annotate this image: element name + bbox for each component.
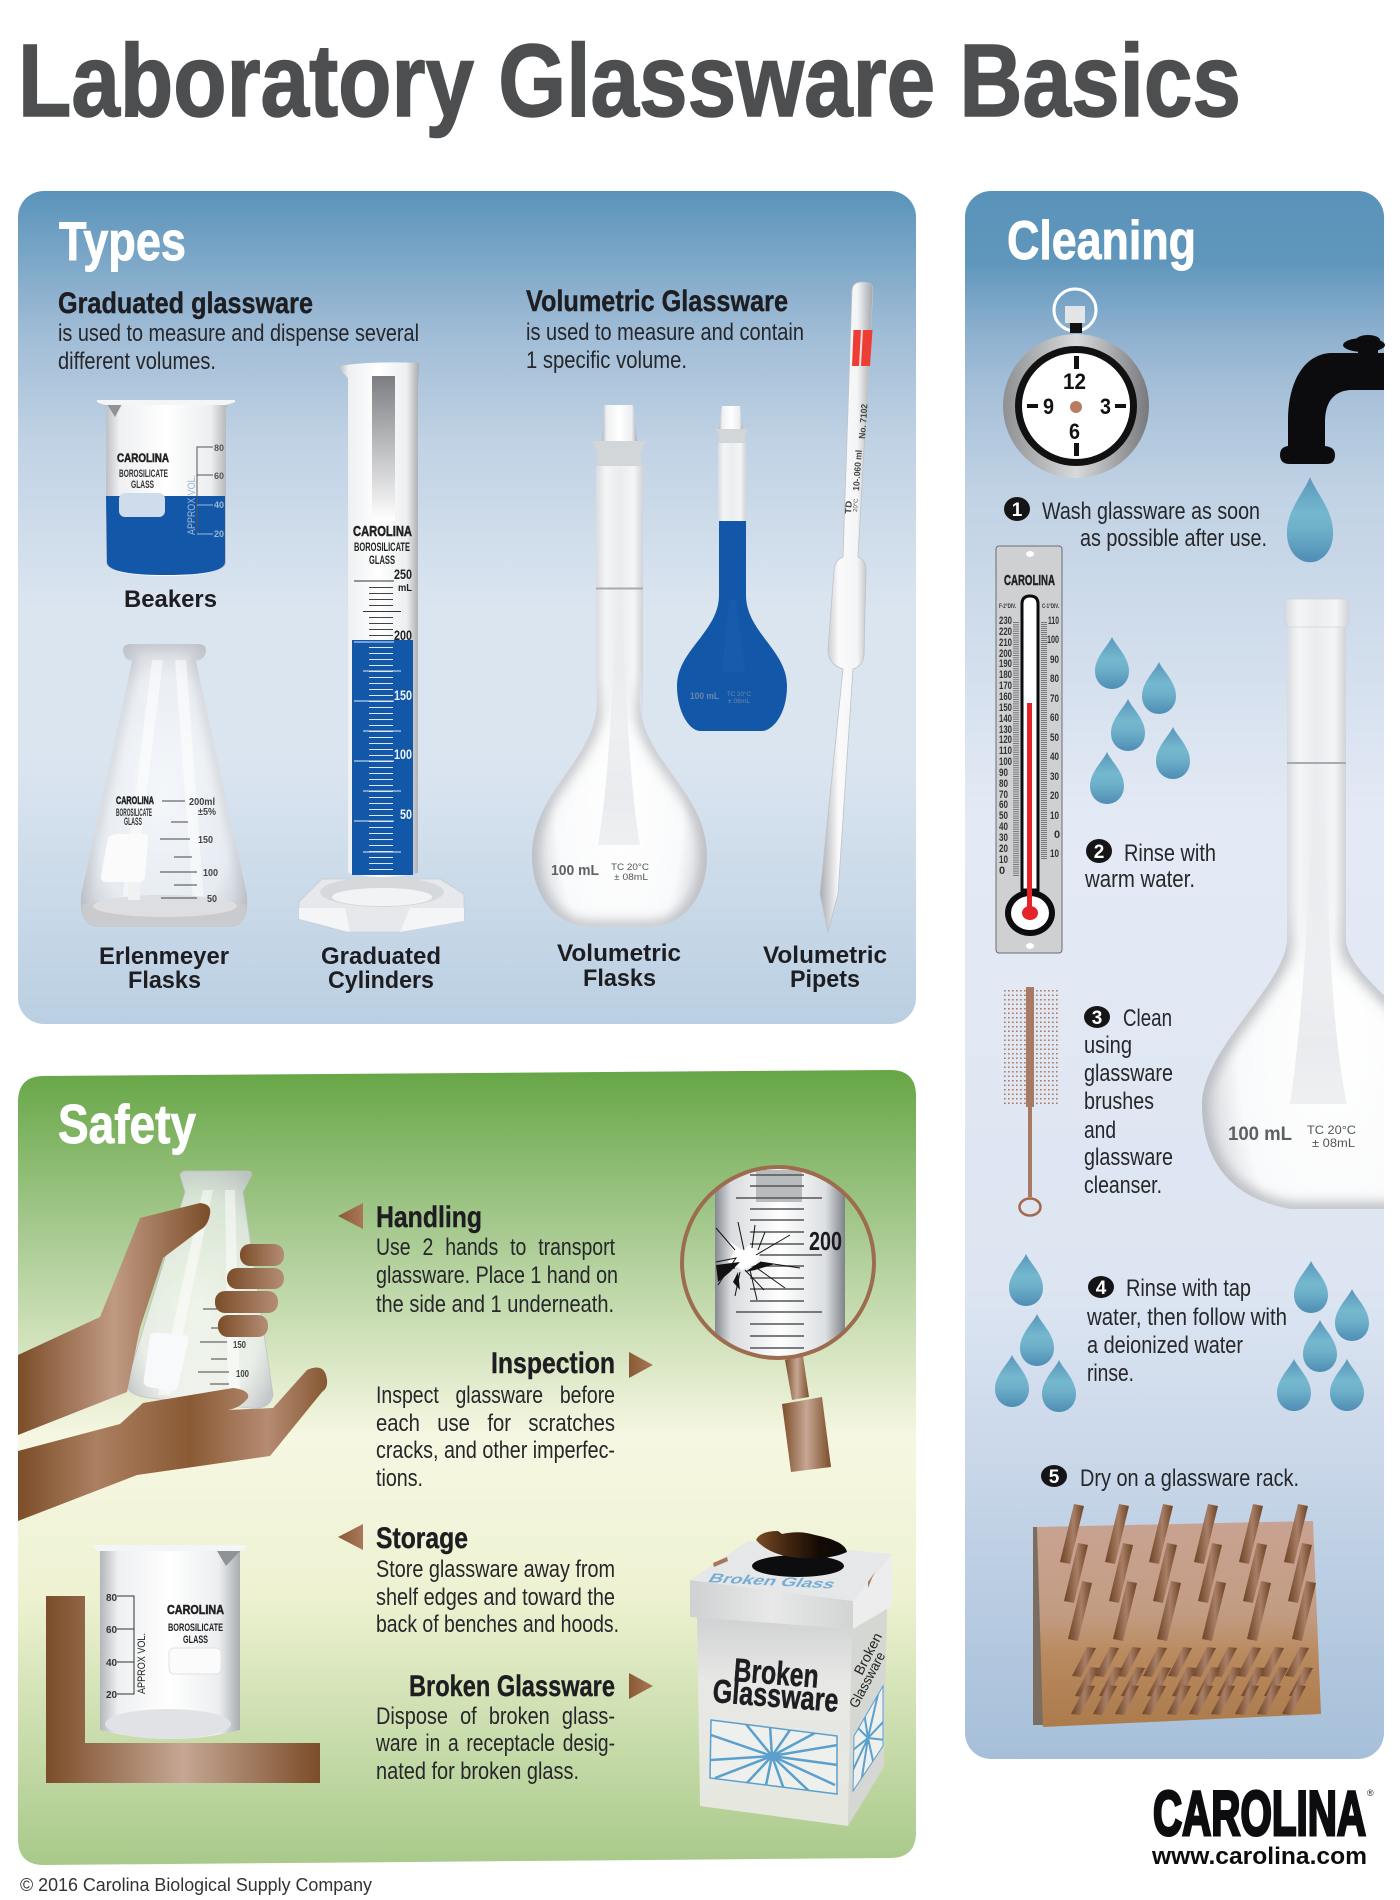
beaker: 40 (214, 500, 224, 510)
graduated cylinder: GLASS (369, 553, 395, 567)
step 3 text: and (1084, 1117, 1116, 1144)
heading: types: Types (59, 210, 186, 272)
copyright: © 2016 Carolina Biological Supply Company (20, 1875, 372, 1895)
text block: inspection: Inspection (491, 1347, 615, 1380)
icon: thermometer: C-1°DIV. (1042, 604, 1059, 610)
beaker: APPROX VOL. (186, 475, 198, 535)
icon: thermometer: 60 (999, 799, 1008, 811)
text block: graduated glassware (58, 287, 419, 375)
arrow: inspection (629, 1352, 653, 1378)
text block: storage (338, 1522, 619, 1638)
step 5 text: Dry on a glassware rack. (1080, 1465, 1299, 1492)
label: volumetric pipets: Volumetric (763, 942, 887, 969)
text block: volumetric glassware: Volumetric Glassware (526, 285, 788, 318)
volumetric flask, empty (532, 405, 707, 927)
icon: thermometer: 40 (1050, 751, 1059, 763)
water drops, step 2 (1090, 637, 1190, 804)
graduated cylinder: mL (398, 583, 412, 594)
volumetric flask, empty: 100 mL (551, 862, 599, 879)
text block: inspection: tions. (376, 1465, 423, 1492)
illustration: broken glass box: Broken (732, 1651, 820, 1695)
volumetric flask, clipped at panel edge (1202, 599, 1400, 1209)
illustration: beaker on shelf: BOROSILICATE (168, 1622, 223, 1634)
label: volumetric flasks: Volumetric (557, 940, 681, 967)
volumetric flask, filled blue (677, 406, 787, 731)
graduated cylinder: 50 (400, 806, 412, 822)
text block: volumetric glassware (526, 285, 804, 374)
erlenmeyer flask: 150 (198, 835, 213, 846)
icon: faucet (1280, 335, 1385, 464)
icon: stopwatch (1003, 289, 1149, 478)
logo: carolina: www.carolina.com (1151, 1843, 1367, 1870)
icon: thermometer: 30 (999, 832, 1008, 844)
step 2 text: warm water. (1084, 866, 1195, 893)
water drops, step 4 right (1277, 1261, 1369, 1411)
icon: thermometer: F-2°DIV. (999, 604, 1016, 610)
text block: storage: Storage (376, 1522, 468, 1555)
illustration: hands holding flask: 150 (233, 1340, 246, 1351)
text block: storage: Store glassware away from (376, 1556, 615, 1583)
step 3 text: using (1084, 1032, 1132, 1059)
erlenmeyer flask: ±5% (198, 807, 216, 818)
volumetric flask, empty: TC 20°C (611, 862, 650, 872)
step 2 text (1084, 839, 1216, 893)
icon: thermometer: 40 (999, 821, 1008, 833)
label: graduated cylinders: Graduated (321, 943, 441, 970)
icon: stopwatch: 3 (1100, 394, 1111, 419)
text block: graduated glassware: is used to measure and dispense several (58, 320, 419, 347)
label: volumetric pipets: Pipets (790, 966, 860, 993)
illustration: beaker on shelf (46, 1545, 320, 1783)
icon: thermometer: 90 (999, 767, 1008, 779)
illustration: beaker on shelf: 60 (106, 1625, 118, 1636)
volumetric pipet: 10-.060 ml (851, 450, 864, 491)
step 3 text: Clean (1123, 1005, 1172, 1032)
volumetric pipet (820, 282, 873, 932)
icon: thermometer: 210 (999, 637, 1012, 649)
panel: cleaning (965, 191, 1400, 1759)
icon: thermometer: 50 (999, 810, 1008, 822)
icon: thermometer: 20 (1050, 790, 1059, 802)
arrow: storage (338, 1524, 363, 1550)
beaker: 20 (214, 529, 224, 539)
text block: inspection: Inspect glassware before (376, 1382, 615, 1409)
illustration: broken glass box: Broken Glass (705, 1570, 840, 1591)
illustration: broken glass box: Glassware (846, 1649, 888, 1710)
icon: thermometer: 80 (1050, 673, 1059, 685)
text block: handling: Handling (376, 1201, 482, 1234)
illustration: beaker on shelf: 40 (106, 1658, 118, 1669)
erlenmeyer flask: 50 (207, 894, 217, 905)
volumetric pipet: TD (843, 500, 854, 514)
text block: handling: glassware. Place 1 hand on (376, 1262, 618, 1289)
icon: thermometer: 190 (999, 658, 1012, 670)
graduated cylinder: 100 (394, 746, 412, 762)
erlenmeyer flask: BOROSILICATE (116, 807, 152, 819)
icon: thermometer: 130 (999, 724, 1012, 736)
erlenmeyer flask: 100 (203, 868, 218, 879)
icon: thermometer: 80 (999, 778, 1008, 790)
beaker (97, 400, 235, 576)
label: volumetric flasks: Flasks (583, 965, 656, 992)
graduated cylinder: BOROSILICATE (354, 540, 410, 554)
graduated cylinder: 200 (394, 627, 412, 643)
illustration: broken glass box: Broken (850, 1630, 885, 1677)
logo: carolina: ® (1367, 1788, 1374, 1798)
label: volumetric flasks (557, 940, 681, 992)
icon: thermometer: 90 (1050, 654, 1059, 666)
illustration: beaker on shelf: 80 (106, 1593, 118, 1604)
volumetric flask, clipped at panel edge: ± 08mL (1312, 1136, 1355, 1150)
icon: thermometer: 60 (1050, 712, 1059, 724)
step 3 text: brushes (1084, 1088, 1154, 1115)
text block: broken glassware: ware in a receptacle desig- (375, 1730, 615, 1757)
icon: thermometer: 100 (1047, 634, 1059, 646)
water drops, step 4 left (995, 1254, 1076, 1412)
icon: thermometer: 220 (999, 626, 1012, 638)
text block: graduated glassware: different volumes. (58, 348, 216, 375)
label: graduated cylinders: Cylinders (328, 967, 434, 994)
step 2 text: 2 (1094, 842, 1104, 863)
step 4 text: 4 (1096, 1278, 1107, 1299)
volumetric flask, clipped at panel edge: TC 20°C (1307, 1123, 1356, 1137)
icon: thermometer: 30 (1050, 771, 1059, 783)
erlenmeyer flask: CAROLINA (116, 795, 154, 807)
text block: volumetric glassware: is used to measure and contain (526, 319, 804, 346)
icon: stopwatch: 9 (1043, 394, 1054, 419)
icon: thermometer: 120 (999, 734, 1012, 746)
glassware drying rack (1033, 1504, 1321, 1727)
step 4 text: rinse. (1087, 1360, 1134, 1387)
icon: thermometer: 160 (999, 691, 1012, 703)
illustration: magnifying glass over cracked cylinder: 200 (809, 1226, 842, 1256)
icon: thermometer: 70 (1050, 693, 1059, 705)
panel: types (18, 191, 916, 1024)
graduated cylinder: 150 (394, 687, 412, 703)
icon: thermometer: 100 (999, 756, 1012, 768)
icon: thermometer: 10 (1050, 810, 1059, 822)
text block: inspection: each use for scratches (376, 1410, 615, 1437)
text block: inspection: cracks, and other imperfec- (376, 1437, 615, 1464)
step 2 text: Rinse with (1124, 840, 1216, 867)
icon: thermometer: 20 (999, 843, 1008, 855)
volumetric flask, filled blue: 100 mL (690, 691, 719, 701)
text block: storage: shelf edges and toward the (376, 1584, 615, 1611)
label: beakers: Beakers (124, 586, 217, 613)
step 3 text (1084, 1005, 1173, 1199)
icon: thermometer: 0 (999, 865, 1005, 877)
text block: handling: the side and 1 underneath. (376, 1291, 614, 1318)
step 1 text: Wash glassware as soon (1042, 498, 1260, 525)
label: graduated cylinders (321, 943, 441, 994)
illustration: hands holding flask (18, 1171, 327, 1521)
step 4 text (1086, 1275, 1287, 1387)
erlenmeyer flask (81, 644, 247, 927)
step 3 text: glassware (1084, 1144, 1173, 1171)
erlenmeyer flask: 200ml (189, 797, 215, 808)
beaker: 60 (214, 471, 224, 481)
arrow: broken glassware (629, 1673, 653, 1699)
label: erlenmeyer flasks: Erlenmeyer (99, 943, 229, 970)
text block: broken glassware: nated for broken glass. (376, 1758, 579, 1785)
illustration: broken glass box (690, 1531, 892, 1826)
graduated cylinder: 250 (394, 566, 412, 582)
icon: stopwatch: 12 (1063, 369, 1086, 394)
step 4 text: Rinse with tap (1126, 1275, 1251, 1302)
step 3 text: glassware (1084, 1060, 1173, 1087)
step 5 text: 5 (1049, 1467, 1060, 1488)
icon: thermometer: 0 (1054, 829, 1060, 841)
volumetric flask, empty: ± 08mL (614, 872, 648, 882)
arrow: handling (338, 1203, 363, 1229)
icon: thermometer: 140 (999, 713, 1012, 725)
illustration: broken glass box: Glassware (711, 1672, 840, 1719)
text block: handling: Use 2 hands to transport (376, 1234, 615, 1261)
illustration: beaker on shelf: 20 (106, 1690, 118, 1701)
volumetric pipet: No. 7102 (857, 404, 869, 439)
icon: thermometer: 200 (999, 648, 1012, 660)
heading: cleaning: Cleaning (1007, 209, 1196, 271)
beaker: GLASS (131, 479, 154, 491)
icon: thermometer: 10 (1050, 848, 1059, 860)
step 3 text: 3 (1092, 1008, 1102, 1029)
text block: inspection (376, 1347, 653, 1492)
icon: thermometer: 110 (1048, 615, 1059, 627)
step 4 text: water, then follow with (1086, 1304, 1287, 1331)
volumetric flask, clipped at panel edge: 100 mL (1228, 1124, 1292, 1145)
text block: broken glassware (375, 1670, 653, 1785)
text block: graduated glassware: Graduated glassware (58, 287, 313, 320)
illustration: beaker on shelf: APPROX VOL. (136, 1633, 148, 1694)
illustration: magnifying glass over cracked cylinder (682, 1160, 874, 1472)
label: volumetric pipets (763, 942, 887, 993)
graduated cylinder (299, 362, 464, 932)
icon: thermometer: 50 (1050, 732, 1059, 744)
icon: stopwatch: 6 (1069, 419, 1080, 444)
illustration: beaker on shelf: GLASS (183, 1634, 208, 1646)
text block: handling (338, 1201, 618, 1318)
icon: water drop (1287, 477, 1333, 562)
icon: thermometer: 150 (999, 702, 1012, 714)
icon: thermometer: 180 (999, 669, 1012, 681)
text block: broken glassware: Dispose of broken glass- (376, 1703, 615, 1730)
logo: carolina (1151, 1779, 1374, 1870)
label: erlenmeyer flasks: Flasks (128, 967, 201, 994)
illustration: hands holding flask: 100 (236, 1369, 249, 1380)
icon: thermometer: 170 (999, 680, 1012, 692)
volumetric flask, filled blue: TC 20°C (727, 692, 752, 698)
step 1 text: 1 (1012, 500, 1023, 521)
icon: thermometer: 70 (999, 789, 1008, 801)
beaker: 80 (214, 443, 224, 453)
label: erlenmeyer flasks (99, 943, 229, 994)
icon: thermometer: 110 (999, 745, 1012, 757)
beaker: CAROLINA (117, 451, 169, 465)
icon: thermometer (996, 546, 1062, 953)
icon: thermometer: CAROLINA (1004, 572, 1055, 589)
graduated cylinder: CAROLINA (353, 523, 412, 540)
step 4 text: a deionized water (1087, 1332, 1243, 1359)
volumetric flask, filled blue: ± 08mL (728, 699, 751, 705)
icon: thermometer: 230 (999, 615, 1012, 627)
text block: broken glassware: Broken Glassware (409, 1670, 615, 1703)
step 1 text (1004, 497, 1267, 552)
beaker: BOROSILICATE (119, 468, 168, 480)
icon: thermometer: 10 (999, 854, 1008, 866)
erlenmeyer flask: GLASS (124, 816, 142, 828)
icon: glassware brush (1002, 987, 1058, 1216)
panel: safety (18, 1070, 916, 1865)
step 3 text: cleanser. (1084, 1172, 1162, 1199)
volumetric pipet: 20°C (853, 498, 860, 512)
heading: safety: Safety (58, 1093, 196, 1155)
text block: storage: back of benches and hoods. (376, 1611, 619, 1638)
text block: volumetric glassware: 1 specific volume. (526, 347, 687, 374)
illustration: beaker on shelf: CAROLINA (167, 1602, 225, 1617)
step 1 text: as possible after use. (1080, 525, 1267, 552)
